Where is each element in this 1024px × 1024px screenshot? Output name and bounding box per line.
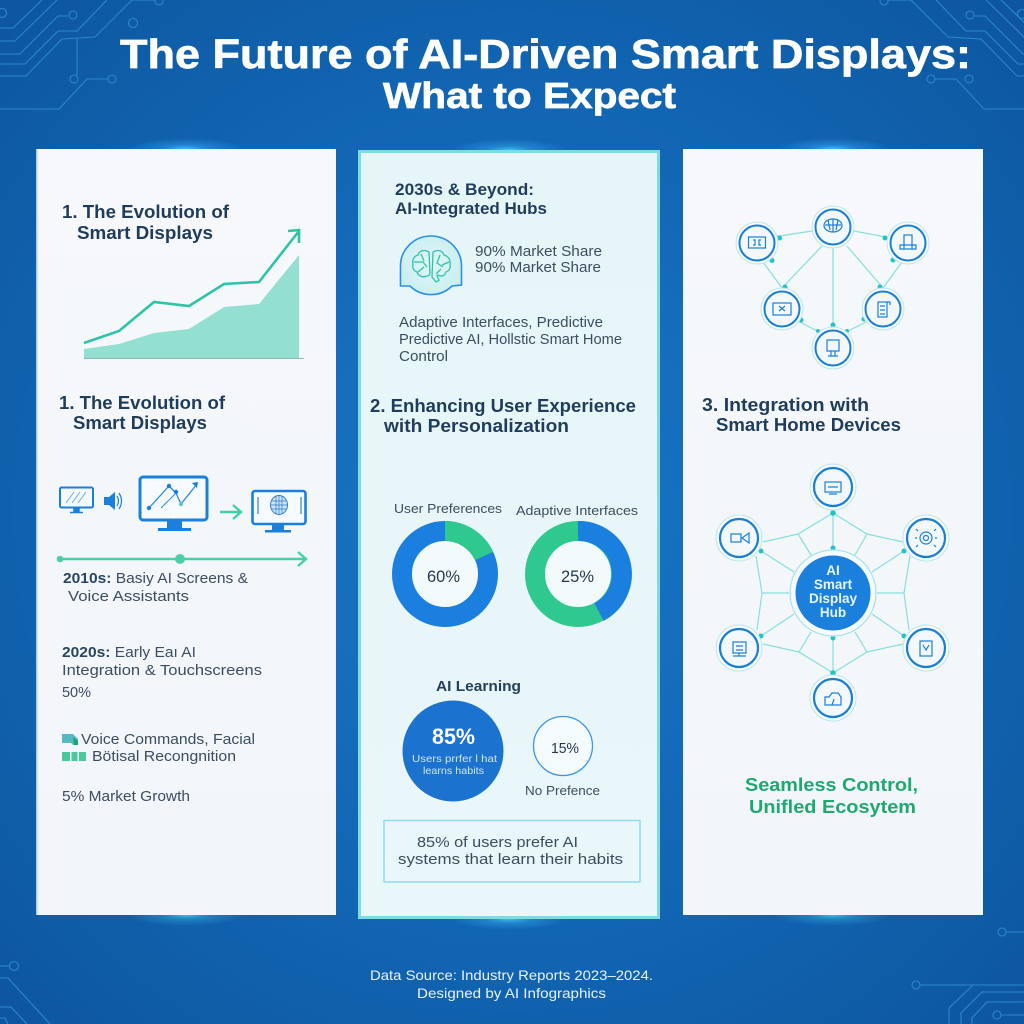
node: phone xyxy=(903,625,949,671)
stat: 85 percent circle: 85% xyxy=(432,724,475,749)
heading: evolution, second xyxy=(59,393,226,433)
text: 2020s: Integration & Touchscreens xyxy=(62,662,262,679)
text: market growth: 5% Market Growth xyxy=(62,788,190,805)
text: features xyxy=(81,731,255,765)
title xyxy=(120,31,971,116)
heading: evolution, second: Smart Displays xyxy=(73,413,207,433)
tagline: Seamless Control, xyxy=(745,775,918,795)
text: 2010s xyxy=(63,570,248,605)
text: adaptive interfaces description xyxy=(399,314,622,365)
text: adaptive interfaces description: Adaptive Interfaces, Predictive xyxy=(399,314,603,331)
panel: personalization xyxy=(360,152,658,918)
diagram: device network xyxy=(736,206,929,369)
chart: adaptive interfaces donut: Adaptive Interfaces xyxy=(516,503,639,518)
area chart with growth arrow xyxy=(84,230,304,358)
icon: small monitor xyxy=(60,488,93,512)
tagline xyxy=(745,775,918,817)
title: The Future of AI-Driven Smart Displays: xyxy=(120,31,971,77)
footer: Designed by AI Infographics xyxy=(417,985,606,1001)
text: 2020s xyxy=(62,644,262,701)
text: market share: 90% Market Share xyxy=(475,243,602,260)
heading: evolution, first xyxy=(62,202,230,243)
icon: feature glyphs xyxy=(62,734,86,761)
footer xyxy=(370,967,653,1001)
text: adaptive interfaces description: Control xyxy=(399,348,448,365)
tagline: Unifled Ecosytem xyxy=(749,797,916,817)
node: devices xyxy=(887,222,929,264)
heading: section 3 xyxy=(702,395,901,435)
icon: monitor with AI globe xyxy=(252,491,306,532)
text: 2010s: 2010s: Basiy AI Screens & xyxy=(63,570,248,587)
stat: 15 percent circle xyxy=(525,716,600,798)
heading: 2030s: AI-Integrated Hubs xyxy=(395,200,547,218)
stat: 15 percent circle: 15% xyxy=(551,740,579,757)
heading: section 2 xyxy=(370,396,636,436)
heading: 2030s xyxy=(395,181,547,218)
node: screen xyxy=(812,327,854,369)
callout: 85% of users prefer AI xyxy=(417,834,578,851)
heading: evolution, first: 1. The Evolution of xyxy=(62,202,230,222)
icon: brain bubble xyxy=(400,236,462,295)
title: What to Expect xyxy=(383,75,676,116)
hub centre: AI xyxy=(826,563,840,578)
text: market share xyxy=(475,243,602,276)
heading: AI learning: AI Learning xyxy=(436,678,521,695)
icon: green arrow xyxy=(220,505,241,519)
chart: user preferences donut: User Preferences xyxy=(394,501,503,516)
chart: user preferences donut xyxy=(394,501,503,617)
hub centre xyxy=(790,550,876,636)
node: display xyxy=(761,288,803,330)
heading: section 2: with Personalization xyxy=(383,416,569,436)
panel: evolution of smart displays xyxy=(36,149,336,915)
node: tablet xyxy=(736,222,778,264)
heading: section 3: Smart Home Devices xyxy=(716,415,901,435)
chart: adaptive interfaces donut xyxy=(516,503,639,617)
icon: speaker xyxy=(104,492,122,510)
heading: evolution, second: 1. The Evolution of xyxy=(59,393,226,413)
text: market share: 90% Market Share xyxy=(475,259,601,276)
node: presentation screen xyxy=(716,625,762,671)
text: features: Voice Commands, Facial xyxy=(81,731,255,748)
node: gear xyxy=(903,515,949,561)
stat: 85 percent circle xyxy=(402,700,504,802)
node: camera xyxy=(716,515,762,561)
node: brain xyxy=(812,206,854,248)
footer: Data Source: Industry Reports 2023–2024. xyxy=(370,967,653,983)
node: folder xyxy=(810,675,856,721)
timeline xyxy=(57,552,306,566)
node: monitor xyxy=(810,464,856,510)
node: document xyxy=(862,288,904,330)
chart: adaptive interfaces donut: 25% xyxy=(561,567,594,586)
diagram: AI smart display hub xyxy=(716,464,949,721)
hub centre: Hub xyxy=(820,605,846,620)
heading: section 2: 2. Enhancing User Experience xyxy=(370,396,636,416)
stat: 85 percent circle: learns habits xyxy=(423,765,484,777)
heading: 2030s: 2030s & Beyond: xyxy=(395,181,534,199)
text: 2010s: Voice Assistants xyxy=(68,588,189,605)
heading: section 3: 3. Integration with xyxy=(702,395,869,415)
text: adaptive interfaces description: Predictive AI, Hollstic Smart Home xyxy=(399,331,622,348)
text: 2020s: 50% xyxy=(62,684,91,701)
icon: large monitor with chart xyxy=(140,477,207,531)
hub centre: Smart xyxy=(814,577,853,592)
panel: smart home integration xyxy=(683,149,983,915)
callout xyxy=(384,820,640,882)
text: 2020s: 2020s: Early Eaı AI xyxy=(62,644,196,661)
heading: evolution, first: Smart Displays xyxy=(77,223,213,243)
hub centre: Display xyxy=(809,591,857,606)
stat: 15 percent circle: No Prefence xyxy=(525,783,600,798)
text: features: Bötisal Recongnition xyxy=(92,748,236,765)
stat: 85 percent circle: Users prrfer l hat xyxy=(412,753,497,765)
chart: user preferences donut: 60% xyxy=(427,567,460,586)
callout: systems that learn their habits xyxy=(398,851,623,868)
